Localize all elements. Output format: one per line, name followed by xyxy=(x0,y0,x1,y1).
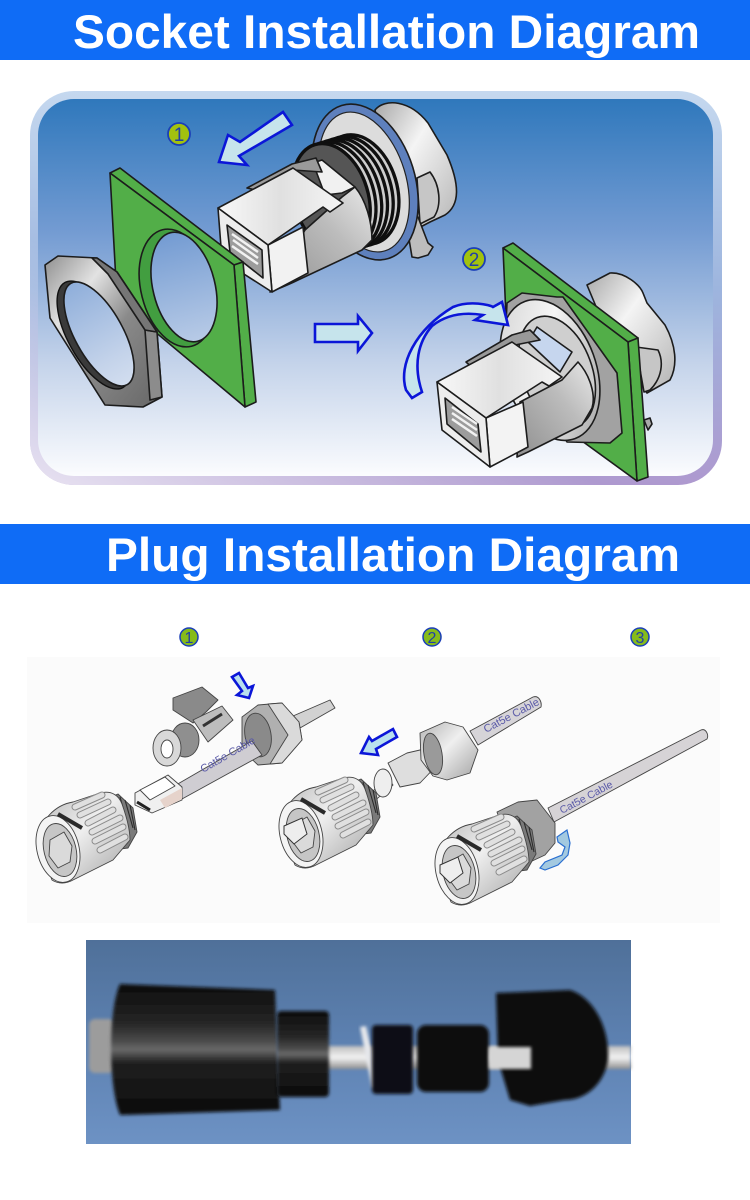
visible cable segment xyxy=(489,1047,531,1069)
label: Cat5e Cable: Cat5e Cable xyxy=(198,735,257,776)
nut face disc xyxy=(482,286,618,454)
panel: plug installation steps xyxy=(27,657,720,923)
cube side xyxy=(486,402,528,467)
arrow: tighten rotation xyxy=(404,302,508,398)
RJ45 plug xyxy=(135,775,182,813)
badge: plug step 1 xyxy=(180,628,198,647)
arrow: clamp direction xyxy=(232,673,253,698)
silver ring face xyxy=(303,101,425,263)
connector metal tip xyxy=(89,1019,115,1073)
cable rear xyxy=(293,700,335,728)
cable rear xyxy=(470,697,541,745)
window through the socket xyxy=(528,327,572,372)
panel frame xyxy=(30,91,722,485)
nut opening xyxy=(420,732,446,776)
step 3 assembled xyxy=(428,730,708,909)
arrow: tighten xyxy=(540,830,570,870)
step 2 assembly xyxy=(272,696,541,872)
connector xyxy=(29,792,137,887)
banner: plug heading xyxy=(0,524,750,584)
seal ring xyxy=(372,1025,413,1094)
clamp halves xyxy=(173,687,233,742)
RJ45 inside connector xyxy=(440,857,463,883)
lock nut xyxy=(42,256,162,407)
compression nut xyxy=(420,722,478,780)
nut on plate xyxy=(505,293,622,443)
compression nut xyxy=(241,703,302,765)
green plate xyxy=(503,243,638,342)
split washer xyxy=(153,723,199,766)
connector thread xyxy=(277,1011,329,1097)
banner: socket heading: Socket Installation Diagram xyxy=(73,5,700,58)
socket assembly after mounting xyxy=(437,243,675,481)
badge: step 2 xyxy=(463,248,485,271)
latch xyxy=(466,330,540,370)
RJ45 inside connector xyxy=(284,818,307,844)
RJ45 opening xyxy=(445,398,481,452)
clamp xyxy=(417,1025,489,1092)
dark flange strip xyxy=(247,158,322,190)
RJ45 opening xyxy=(227,225,263,278)
compression nut xyxy=(496,990,608,1106)
cable core and seal xyxy=(366,747,442,803)
badge: plug step 3: 3 xyxy=(636,630,645,647)
cube side xyxy=(268,227,308,292)
mounting bracket xyxy=(405,215,433,258)
light latch xyxy=(313,160,355,195)
badge: step 1 xyxy=(168,123,190,146)
panel gradient background xyxy=(38,99,713,476)
arrow: push direction xyxy=(361,729,397,755)
badge: plug step 2: 2 xyxy=(428,630,437,647)
cube top xyxy=(437,342,562,418)
badge: plug step 3 xyxy=(631,628,649,647)
inner hole rim xyxy=(504,306,610,438)
label: Cat5e Cable: Cat5e Cable xyxy=(558,779,615,817)
cable flat section xyxy=(176,741,262,799)
cable xyxy=(325,1046,631,1069)
barrel xyxy=(270,187,372,292)
cube front xyxy=(437,382,490,467)
green panel with cutout xyxy=(110,168,256,407)
threaded section xyxy=(279,125,412,263)
connector xyxy=(428,814,536,909)
barrel xyxy=(517,362,593,457)
white washer xyxy=(360,1026,380,1088)
badge: step 1: 1 xyxy=(174,125,184,146)
cube top xyxy=(218,168,343,245)
photo: disassembled plug xyxy=(86,940,631,1144)
frame highlight fade xyxy=(30,91,722,485)
label: Cat5e Cable: Cat5e Cable xyxy=(482,696,541,736)
rear cap xyxy=(375,103,457,235)
arrow: insert socket xyxy=(219,112,292,165)
socket assembly before mounting xyxy=(218,91,457,292)
long cable xyxy=(548,730,708,822)
connector body xyxy=(111,984,280,1115)
blue gasket ring xyxy=(294,91,436,273)
bracket pin xyxy=(644,418,652,430)
banner: plug heading: Plug Installation Diagram xyxy=(106,528,680,581)
panel: socket installation xyxy=(30,91,722,485)
connector xyxy=(272,777,380,872)
badge: plug step 1: 1 xyxy=(185,630,194,647)
badge: plug step 2 xyxy=(423,628,441,647)
arrow: next step xyxy=(315,316,372,351)
badge: step 2: 2 xyxy=(469,250,479,271)
nut body xyxy=(497,800,555,862)
cube front xyxy=(218,208,272,292)
rear cap xyxy=(587,273,675,393)
step 1 exploded view xyxy=(29,673,335,887)
